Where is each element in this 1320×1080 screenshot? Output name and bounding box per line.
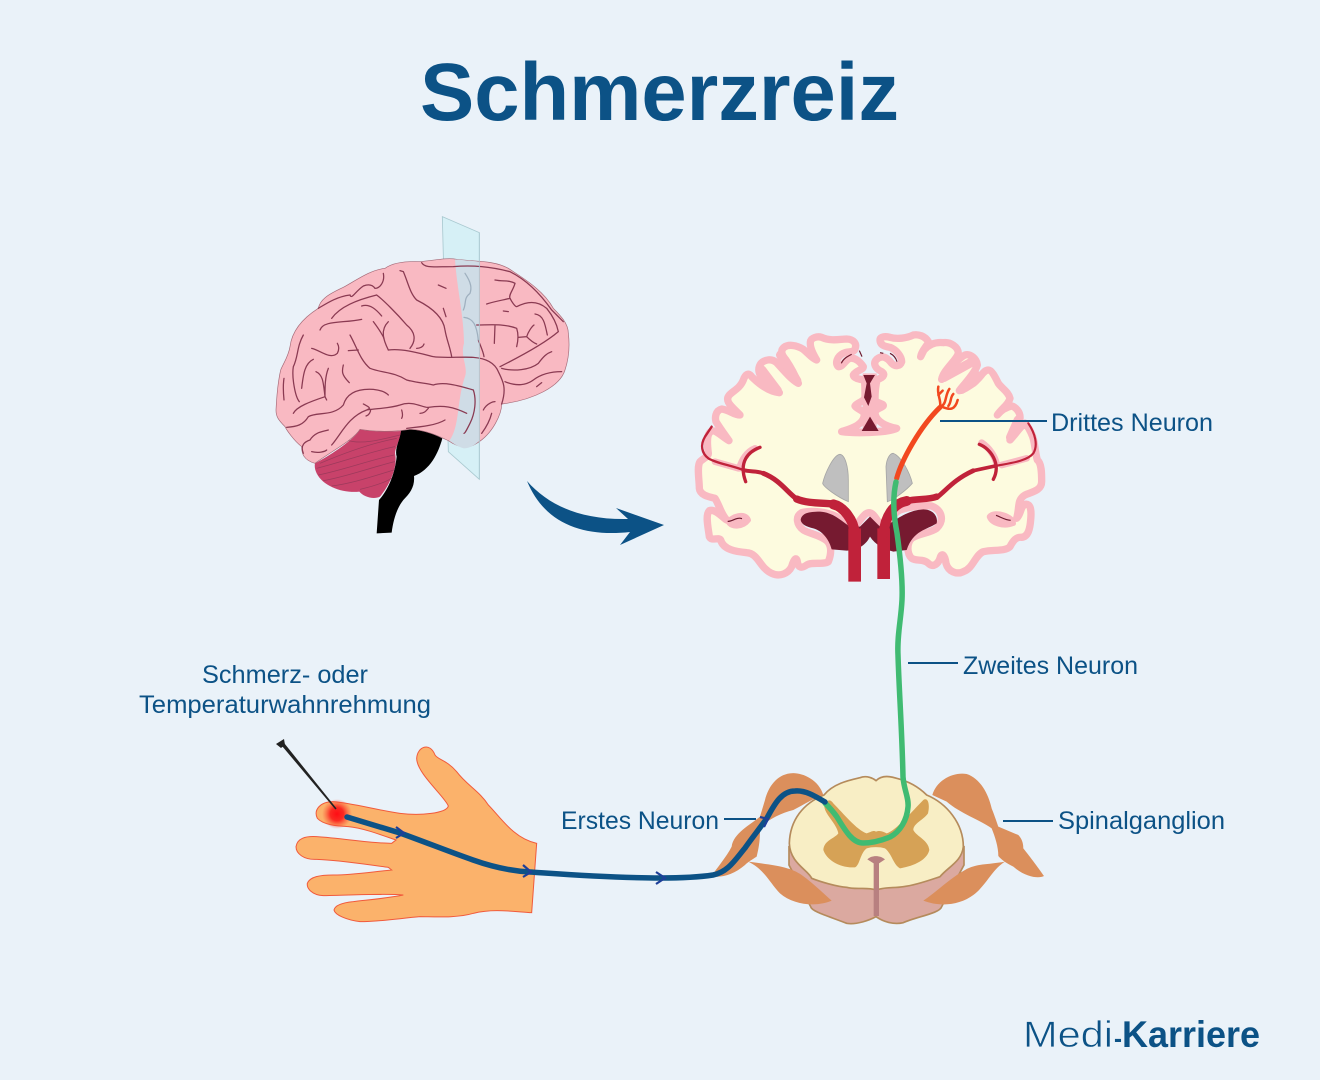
arteries [702, 423, 1036, 582]
ventricle [801, 509, 937, 552]
insula sulcus right [989, 514, 1013, 525]
logo: - [1114, 1023, 1122, 1053]
spinal cord section [712, 773, 1044, 924]
label: Zweites Neuron: Zweites Neuron [963, 652, 1138, 680]
cord base [789, 847, 964, 924]
fissure dark [862, 375, 879, 431]
left ganglion [712, 773, 823, 877]
plane edge over brain [478, 233, 481, 479]
insula sulcus left [728, 516, 748, 526]
label line: Zweites Neuron [908, 662, 958, 664]
logo: Karriere [1122, 1014, 1260, 1055]
drittes neuron [897, 387, 958, 478]
pain spot [322, 799, 352, 829]
zweites neuron [825, 482, 908, 843]
left ventral root [748, 862, 832, 904]
hand [296, 747, 537, 922]
label line: Spinalganglion [1003, 820, 1053, 822]
label: pain perception: Schmerz- oder [202, 661, 368, 689]
erstes neuron path [347, 791, 825, 878]
grey matter [823, 799, 929, 868]
label line: Drittes Neuron [940, 420, 1047, 422]
small dark sulci [728, 351, 1011, 521]
cerebrum [276, 259, 569, 463]
brainstem [377, 429, 442, 533]
right ganglion [932, 774, 1044, 877]
needle [276, 739, 337, 810]
logo [1023, 1014, 1260, 1055]
cerebellum [315, 429, 401, 498]
label line: Erstes Neuron [724, 818, 756, 820]
white matter [789, 777, 963, 890]
label: Spinalganglion: Spinalganglion [1058, 807, 1225, 835]
label: pain perception [139, 661, 431, 719]
callosum band [843, 429, 896, 432]
brain sulci [283, 263, 563, 453]
curved arrow [527, 481, 664, 545]
section overlay on brain [449, 259, 479, 448]
label: Drittes Neuron: Drittes Neuron [1051, 409, 1213, 437]
logo: Medi [1023, 1014, 1113, 1055]
label: pain perception: Temperaturwahnrehmung [139, 691, 431, 719]
cortex and white matter [698, 335, 1042, 575]
pink bands along arteries [715, 443, 1027, 468]
nerve direction arrows [396, 817, 768, 884]
title: Schmerzreiz [420, 47, 899, 138]
fissure pink strip [863, 373, 877, 432]
glass section plane [442, 217, 479, 479]
brain side view [276, 217, 569, 533]
label: Erstes Neuron: Erstes Neuron [561, 807, 719, 835]
right ventral root [923, 862, 1005, 904]
thick gyral folds [762, 355, 1018, 437]
brain coronal section [698, 335, 1042, 582]
grey nuclei [823, 453, 912, 502]
central canal [867, 856, 885, 916]
